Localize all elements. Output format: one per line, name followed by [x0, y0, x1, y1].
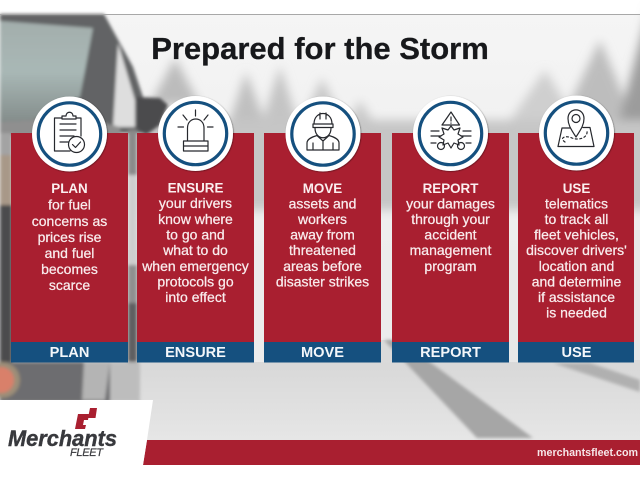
- plan text block: and fuel: [45, 245, 94, 261]
- plan card: [11, 133, 128, 342]
- use text block: fleet vehicles,: [534, 226, 619, 242]
- plan text block: becomes: [41, 261, 98, 277]
- ensure text block: your drivers: [159, 195, 232, 211]
- use text block: discover drivers': [526, 242, 627, 258]
- panel: ensure: [137, 96, 254, 362]
- panel: report: [392, 96, 509, 362]
- icon: construction worker: [286, 96, 360, 172]
- icon: car crash with warning sign: [413, 96, 488, 171]
- report footer bar: REPORT: [420, 345, 481, 361]
- move footer bar: [264, 342, 381, 362]
- use footer bar: USE: [561, 345, 592, 361]
- ensure footer bar: [137, 342, 254, 362]
- move text block: workers: [297, 211, 347, 227]
- report text block: through your: [411, 211, 490, 227]
- logo subtitle: FLEET: [70, 447, 104, 459]
- panel: plan: [11, 96, 128, 362]
- move text block: areas before: [283, 258, 362, 274]
- bottom white margin: [0, 465, 640, 480]
- move text block: MOVE: [303, 181, 342, 196]
- move footer bar: MOVE: [301, 345, 344, 361]
- use text block: USE: [563, 181, 590, 196]
- report text block: [406, 181, 495, 274]
- logo wordmark: Merchants: [8, 426, 117, 451]
- panel: move: [264, 96, 381, 362]
- move text block: [276, 181, 369, 290]
- use text block: to track all: [545, 211, 608, 227]
- move text block: assets and: [289, 196, 356, 212]
- move text block: threatened: [289, 242, 356, 258]
- ensure text block: ENSURE: [168, 180, 223, 196]
- use text block: if assistance: [538, 289, 615, 305]
- report text block: accident: [424, 226, 477, 242]
- icon: emergency beacon: [158, 96, 233, 171]
- use text block: telematics: [545, 196, 608, 212]
- plan text block: [32, 181, 107, 293]
- use text block: [526, 181, 627, 320]
- report card: [392, 133, 509, 342]
- icon: map with location pin: [539, 96, 614, 170]
- plan footer bar: PLAN: [50, 345, 89, 361]
- report text block: REPORT: [423, 181, 479, 196]
- ensure text block: when emergency: [141, 258, 249, 274]
- report text block: your damages: [406, 196, 495, 212]
- plan text block: concerns as: [32, 213, 107, 229]
- footer bar: [143, 440, 640, 465]
- move text block: disaster strikes: [276, 274, 369, 290]
- website address: merchantsfleet.com: [537, 447, 638, 459]
- title: Prepared for the Storm: [151, 31, 489, 66]
- report text block: management: [410, 242, 491, 258]
- ensure text block: to go and: [166, 226, 225, 242]
- use footer bar: [518, 342, 634, 362]
- plan text block: scarce: [49, 277, 90, 293]
- logo block: [0, 400, 153, 465]
- ensure text block: into effect: [165, 289, 226, 305]
- use card: [518, 133, 634, 342]
- ensure text block: what to do: [162, 242, 228, 258]
- report footer bar: [392, 342, 509, 362]
- plan footer bar: [11, 342, 128, 362]
- ensure footer bar: ENSURE: [165, 345, 226, 361]
- ensure text block: protocols go: [157, 274, 234, 290]
- plan text block: PLAN: [51, 181, 88, 196]
- logo mark: [75, 408, 97, 429]
- ensure text block: know where: [158, 211, 233, 227]
- use text block: location and: [539, 258, 614, 274]
- report text block: program: [424, 258, 477, 274]
- ensure text block: [141, 180, 249, 305]
- use text block: and determine: [532, 274, 621, 290]
- move card: [264, 133, 381, 342]
- plan text block: for fuel: [48, 196, 91, 212]
- panel: use: [518, 96, 634, 362]
- top rule: [0, 14, 640, 15]
- plan text block: prices rise: [38, 229, 102, 245]
- use text block: is needed: [546, 304, 607, 320]
- icon: clipboard with check: [32, 96, 107, 172]
- move text block: away from: [290, 226, 355, 242]
- ensure card: [137, 133, 254, 342]
